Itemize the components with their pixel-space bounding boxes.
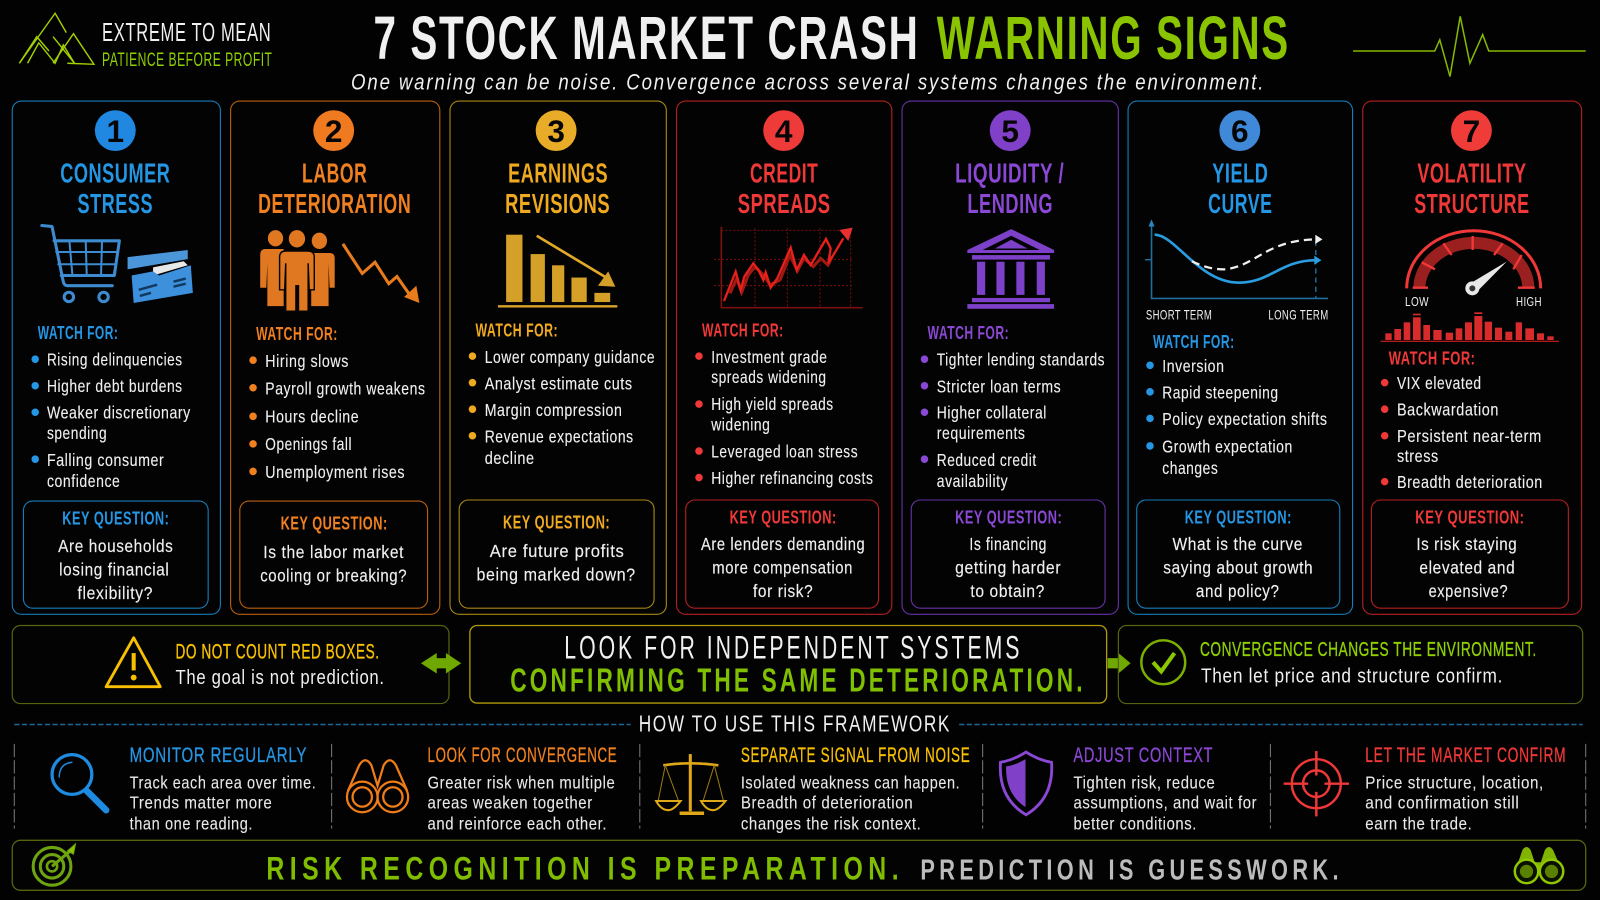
key question box: Are lenders demanding	[701, 534, 865, 554]
panel heading: STRUCTURE	[1414, 188, 1530, 219]
step: separate signal from noise: Isolated weakness can happen.	[741, 772, 960, 792]
watch for list: High yield spreads	[711, 394, 834, 414]
key question box: being marked down?	[477, 565, 636, 585]
watch for list: Leveraged loan stress	[711, 442, 858, 462]
callout: independent systems: CONFIRMING THE SAME DETERIORATION.	[510, 663, 1086, 700]
watch for list: Reduced credit	[937, 450, 1037, 470]
number badge 6: 6	[1231, 113, 1249, 149]
arrow: double headed	[421, 653, 461, 673]
panel heading: LIQUIDITY /	[955, 158, 1064, 189]
number badge 3	[536, 110, 577, 151]
callout: convergence: Then let price and structure confirm.	[1201, 666, 1503, 688]
callout: independent systems	[470, 626, 1107, 703]
key question box: Are future profits	[490, 541, 624, 561]
step: adjust context	[1000, 743, 1257, 834]
panel heading	[1414, 158, 1530, 219]
step: adjust context: better conditions.	[1073, 814, 1197, 834]
panel: consumer stress	[12, 101, 220, 614]
number badge 2: 2	[325, 113, 342, 149]
watch for list: Investment grade	[711, 347, 828, 367]
panel heading	[60, 158, 170, 219]
watch for list: WATCH FOR:	[1153, 331, 1235, 352]
step: look for convergence: Greater risk when multiple	[428, 772, 615, 792]
title: WARNING SIGNS	[937, 4, 1290, 72]
watch for list: Higher collateral	[937, 402, 1047, 422]
arrow: right	[1108, 653, 1131, 673]
icon: shopping cart and credit card	[42, 226, 193, 303]
chart: rising credit spreads	[714, 227, 863, 308]
watch for list: WATCH FOR:	[476, 320, 558, 341]
step: let the market confirm: earn the trade.	[1365, 814, 1472, 834]
watch for list: requirements	[937, 423, 1026, 443]
number badge 5: 5	[1001, 113, 1019, 149]
icon: bank building	[967, 229, 1054, 309]
icon: magnifier	[52, 755, 106, 810]
icon: target with arrow	[33, 844, 76, 885]
panel heading: CURVE	[1208, 188, 1272, 219]
panel heading	[1208, 158, 1272, 219]
watch for list: Falling consumer	[47, 450, 164, 470]
title: 7 STOCK MARKET CRASH	[373, 4, 919, 72]
watch for list: VIX elevated	[1397, 373, 1482, 393]
watch for list: Breadth deterioration	[1397, 472, 1543, 492]
watch for list: WATCH FOR:	[256, 323, 338, 344]
key question box: Is risk staying	[1416, 534, 1517, 554]
panel: labor deterioration	[231, 101, 440, 614]
key question box: Is the labor market	[263, 542, 404, 562]
header logo	[19, 13, 272, 71]
key question box: KEY QUESTION:	[1415, 506, 1524, 527]
key question box: expensive?	[1429, 581, 1508, 601]
watch for list: Analyst estimate cuts	[485, 373, 633, 393]
panel heading	[738, 158, 831, 219]
panel heading	[258, 158, 411, 219]
number badge 7	[1451, 110, 1492, 151]
watch for list: Policy expectation shifts	[1162, 409, 1328, 429]
panel heading	[955, 158, 1064, 219]
step: monitor regularly: Track each area over time.	[130, 772, 316, 792]
step: monitor regularly	[52, 743, 316, 834]
key question box: KEY QUESTION:	[503, 512, 610, 533]
watch for list: Higher refinancing costs	[711, 468, 873, 488]
step: look for convergence	[347, 743, 617, 834]
watch for list: Persistent near-term	[1397, 426, 1542, 446]
watch for list: WATCH FOR:	[1389, 347, 1476, 368]
step: separate signal from noise: changes the risk context.	[741, 814, 921, 834]
watch for list: Inversion	[1162, 356, 1224, 376]
watch for list: Backwardation	[1397, 399, 1499, 419]
watch for list: confidence	[47, 471, 120, 491]
icon: filled binoculars	[1514, 847, 1563, 883]
icon: heartbeat pulse line	[1353, 16, 1586, 77]
panel heading: CONSUMER	[60, 158, 170, 189]
watch for list	[32, 322, 191, 491]
number badge 1: 1	[107, 113, 124, 149]
watch for list: Payroll growth weakens	[265, 378, 426, 398]
key question box: saying about growth	[1163, 557, 1313, 577]
banner slogan: PREDICTION IS GUESSWORK.	[920, 855, 1343, 887]
number badge 5	[990, 110, 1031, 151]
key question box: cooling or breaking?	[260, 566, 407, 586]
step: adjust context: assumptions, and wait for	[1073, 793, 1257, 813]
icon: warning triangle	[106, 638, 160, 687]
panel heading: REVISIONS	[505, 188, 610, 219]
key question box: KEY QUESTION:	[1185, 506, 1292, 527]
icon: mountains	[19, 13, 94, 64]
banner slogan: RISK RECOGNITION IS PREPARATION.	[266, 850, 904, 887]
key question box	[459, 500, 654, 608]
step: monitor regularly: Trends matter more	[130, 793, 272, 813]
step: adjust context: Tighten risk, reduce	[1073, 772, 1215, 792]
key question box	[911, 500, 1105, 608]
watch for list	[921, 322, 1105, 491]
icon: balance scales	[656, 754, 726, 813]
icon: shield	[1000, 752, 1052, 815]
number badge 6	[1219, 110, 1260, 151]
watch for list: spending	[47, 423, 107, 443]
watch for list: WATCH FOR:	[928, 322, 1009, 343]
callout: do not count red boxes: The goal is not prediction.	[176, 667, 385, 689]
callout: do not count red boxes: DO NOT COUNT RED BOXES.	[176, 641, 380, 664]
chart: yield curve	[1145, 219, 1329, 322]
watch for list: Margin compression	[485, 400, 622, 420]
icon: falling bars	[498, 235, 617, 308]
panel: volatility structure	[1363, 101, 1582, 614]
watch for list	[469, 320, 655, 468]
subtitle: One warning can be noise. Convergence across several systems changes the environment.	[351, 69, 1265, 94]
key question box	[240, 501, 428, 608]
key question box: Are households	[58, 536, 173, 556]
icon: workers and falling arrow	[260, 230, 419, 311]
key question box: KEY QUESTION:	[730, 506, 837, 527]
number badge 7: 7	[1463, 113, 1480, 149]
step: let the market confirm: and confirmation still	[1365, 793, 1519, 813]
panel heading: STRESS	[78, 188, 153, 219]
key question box	[23, 501, 208, 608]
key question box: Is financing	[969, 534, 1047, 554]
key question box: elevated and	[1419, 557, 1515, 577]
key question box: losing financial	[59, 560, 169, 580]
step: separate signal from noise: SEPARATE SIGNAL FROM NOISE	[741, 743, 970, 767]
key question box: flexibility?	[78, 583, 153, 603]
key question box	[1371, 500, 1568, 608]
callout: convergence	[1118, 626, 1583, 704]
watch for list: Growth expectation	[1162, 437, 1293, 457]
watch for list: Weaker discretionary	[47, 402, 191, 422]
icon: crosshair	[1284, 751, 1349, 816]
step: look for convergence: LOOK FOR CONVERGENCE	[428, 743, 617, 767]
icon: binoculars outline	[347, 760, 408, 812]
panel heading: LABOR	[302, 158, 367, 189]
watch for list: decline	[485, 448, 535, 468]
watch for list: Openings fall	[265, 434, 352, 454]
panel heading: CREDIT	[750, 158, 818, 189]
watch for list	[1147, 331, 1328, 478]
key question box: getting harder	[955, 557, 1061, 577]
watch for list: Revenue expectations	[485, 426, 634, 446]
step: separate signal from noise	[656, 743, 970, 834]
bottom banner	[12, 840, 1586, 890]
brand name: EXTREME TO MEAN	[102, 19, 271, 47]
panel heading: LENDING	[967, 188, 1053, 219]
watch for list: WATCH FOR:	[38, 322, 118, 343]
key question box	[1137, 500, 1340, 608]
watch for list: widening	[710, 415, 770, 435]
step: let the market confirm	[1284, 743, 1566, 834]
icon: check circle	[1141, 640, 1185, 684]
panel heading: SPREADS	[738, 188, 831, 219]
number badge 3: 3	[547, 113, 565, 149]
panel: liquidity and lending	[902, 101, 1118, 614]
key question box: KEY QUESTION:	[281, 513, 388, 534]
panel: earnings revisions	[450, 101, 666, 614]
chart: volatility gauge	[1381, 231, 1559, 342]
key question box: to obtain?	[970, 581, 1045, 601]
key question box: KEY QUESTION:	[62, 507, 169, 528]
callout: do not count red boxes	[12, 626, 449, 704]
chart: yield curve: LONG TERM	[1268, 307, 1329, 322]
watch for list: changes	[1162, 458, 1218, 478]
number badge 2	[313, 110, 354, 151]
watch for list: stress	[1397, 446, 1439, 466]
watch for list: Lower company guidance	[485, 347, 655, 367]
watch for list: Higher debt burdens	[47, 376, 183, 396]
number badge 1	[95, 110, 136, 151]
watch for list	[1381, 347, 1543, 492]
watch for list: availability	[937, 471, 1008, 491]
step: monitor regularly: than one reading.	[130, 814, 253, 834]
number badge 4: 4	[775, 113, 793, 149]
panel heading: YIELD	[1212, 158, 1268, 189]
key question box: What is the curve	[1172, 534, 1303, 554]
callout: independent systems: LOOK FOR INDEPENDENT SYSTEMS	[564, 629, 1022, 666]
key question box	[686, 500, 879, 608]
key question box: KEY QUESTION:	[955, 506, 1062, 527]
step: adjust context: ADJUST CONTEXT	[1073, 743, 1213, 767]
chart: volatility gauge: LOW	[1405, 294, 1429, 309]
step: separate signal from noise: Breadth of deterioration	[741, 793, 913, 813]
step: look for convergence: areas weaken together	[428, 793, 593, 813]
watch for list: Rising delinquencies	[47, 350, 183, 370]
watch for list: Unemployment rises	[265, 462, 405, 482]
watch for list: WATCH FOR:	[702, 320, 784, 341]
key question box: for risk?	[753, 581, 813, 601]
step: let the market confirm: Price structure, location,	[1365, 772, 1544, 792]
number badge 4	[763, 110, 804, 151]
watch for list: Tighter lending standards	[937, 349, 1105, 369]
step: monitor regularly: MONITOR REGULARLY	[130, 743, 307, 767]
watch for list: spreads widening	[711, 367, 827, 387]
watch for list	[250, 323, 426, 482]
panel heading: DETERIORATION	[258, 188, 411, 219]
section heading: how to use: HOW TO USE THIS FRAMEWORK	[639, 711, 951, 737]
panel heading: EARNINGS	[508, 158, 608, 189]
watch for list	[696, 320, 873, 488]
chart: yield curve: SHORT TERM	[1146, 307, 1212, 322]
step: look for convergence: and reinforce each other.	[428, 814, 607, 834]
panel: yield curve	[1128, 101, 1353, 614]
brand tagline: PATIENCE BEFORE PROFIT	[102, 49, 272, 71]
key question box: and policy?	[1196, 581, 1280, 601]
panel heading	[505, 158, 610, 219]
watch for list: Hours decline	[265, 406, 359, 426]
panel heading: VOLATILITY	[1417, 158, 1527, 189]
watch for list: Stricter loan terms	[937, 376, 1061, 396]
panel: credit spreads	[677, 101, 892, 614]
chart: volatility gauge: HIGH	[1516, 294, 1542, 309]
watch for list: Rapid steepening	[1162, 382, 1279, 402]
key question box: more compensation	[712, 557, 853, 577]
watch for list: Hiring slows	[265, 351, 349, 371]
